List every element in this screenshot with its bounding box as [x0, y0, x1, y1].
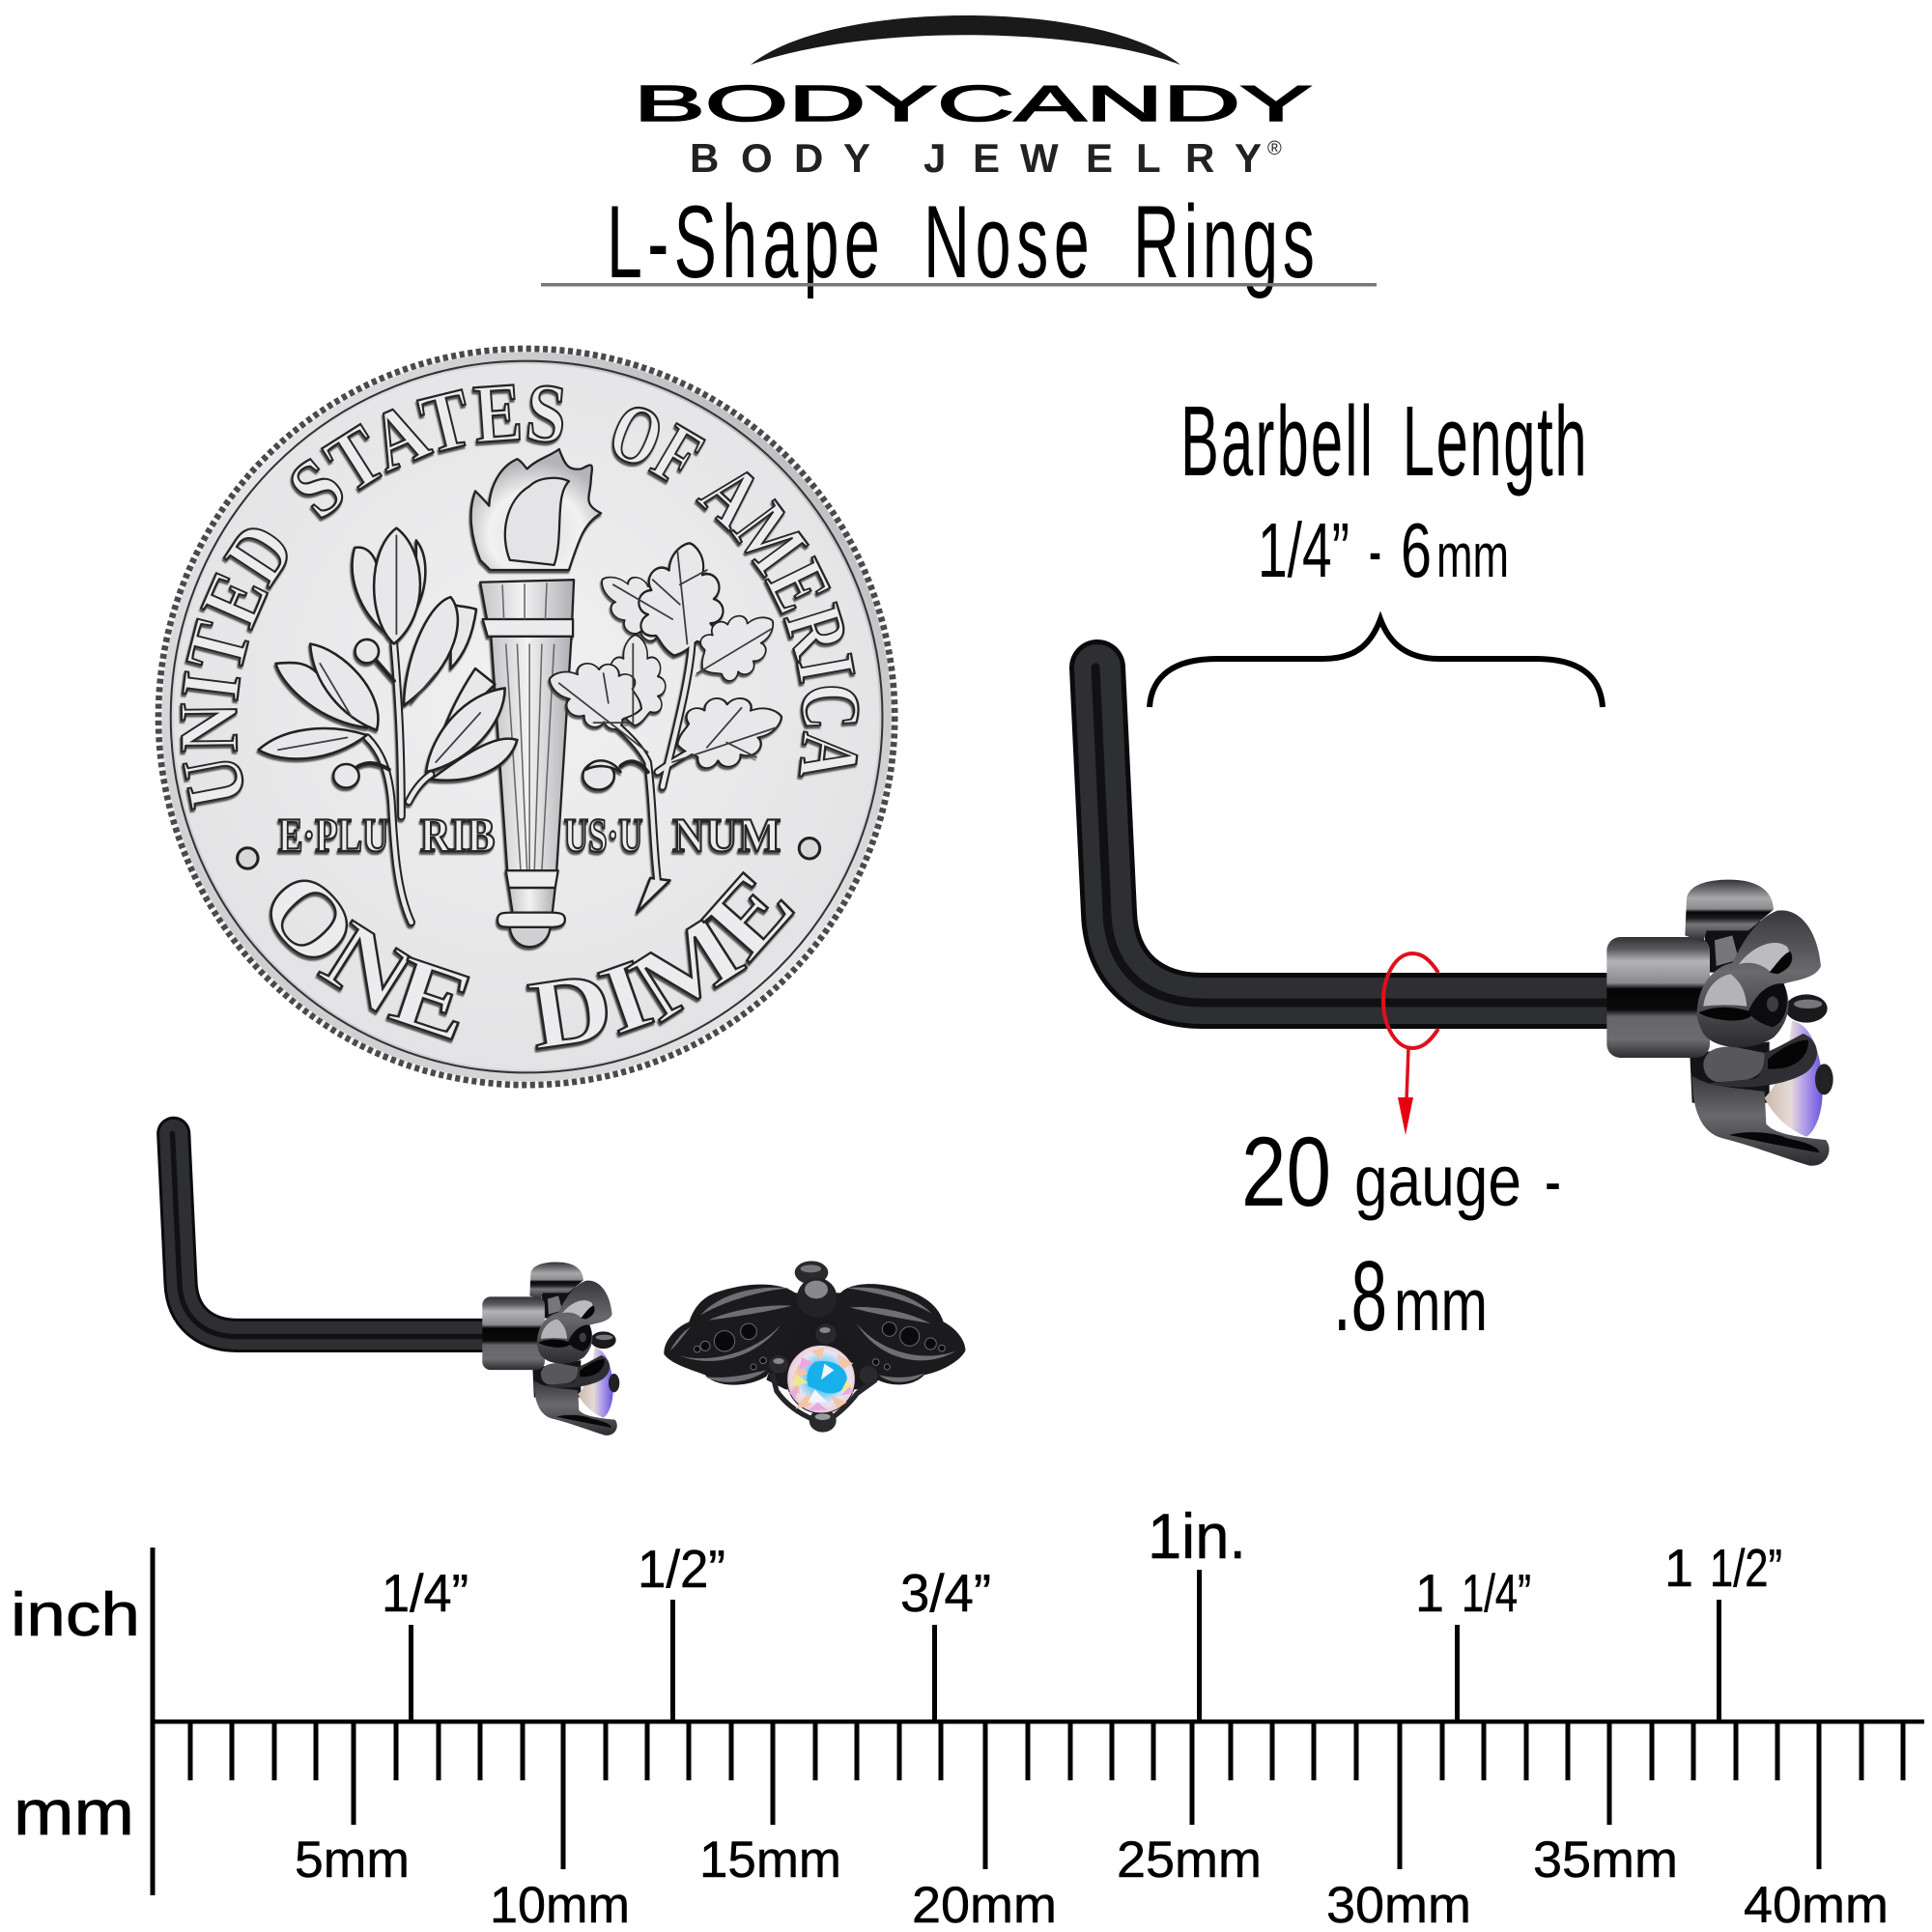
- inch axis label: inch: [11, 1581, 140, 1649]
- coin motto: NUM: [672, 808, 781, 862]
- title: Rings: [1133, 184, 1315, 299]
- brand logo: [634, 15, 1312, 181]
- barbell length value: mm: [1436, 521, 1509, 590]
- barbell length heading: Length: [1403, 385, 1587, 497]
- title: Nose: [923, 184, 1090, 299]
- logo tagline: BODY JEWELRY: [690, 135, 1262, 181]
- millimetre tick labels: 5mm: [295, 1832, 410, 1889]
- barbell length value: 1/4”: [1258, 507, 1350, 593]
- ruler axes: [151, 1548, 1924, 1895]
- reeded edge: [158, 349, 895, 1085]
- barbell length value: -: [1369, 507, 1381, 593]
- barbell length heading: [1180, 385, 1587, 497]
- coin legend: one dime: ONE DIME: [268, 871, 796, 1054]
- gauge label: mm: [1394, 1264, 1488, 1347]
- logo tagline: ®: [1267, 138, 1282, 159]
- millimetre tick labels: 35mm: [1533, 1832, 1678, 1889]
- inch tick labels: [382, 1500, 1782, 1623]
- logo swoosh: [751, 15, 1180, 65]
- inch tick labels: 3/4”: [900, 1563, 991, 1623]
- gauge label: gauge: [1354, 1141, 1521, 1221]
- left wing: [664, 1285, 802, 1385]
- coin: one dime for scale: [155, 346, 898, 1088]
- large L-shape nose ring side view: [1095, 668, 1833, 1166]
- firefly nose ring top front view: [664, 1261, 965, 1433]
- barbell length value: 6: [1401, 507, 1432, 593]
- gauge label: -: [1545, 1141, 1561, 1221]
- inch tick labels: 1in.: [1148, 1500, 1246, 1572]
- coin torch: [471, 449, 601, 947]
- title: L-Shape: [607, 184, 880, 299]
- coin motto: US·U: [564, 808, 643, 862]
- wing highlights: [669, 1288, 956, 1382]
- coin dots: [238, 838, 820, 868]
- wing filigree dots: [694, 1322, 945, 1370]
- gauge label: .8: [1333, 1240, 1387, 1351]
- firefly head and body: [795, 1261, 837, 1345]
- inch tick labels: 1/2”: [638, 1539, 725, 1599]
- gem prongs: [769, 1355, 877, 1433]
- inch ticks: [412, 1570, 1719, 1721]
- barbell length heading: Barbell: [1180, 385, 1373, 497]
- red gauge ring marker: [1383, 953, 1438, 1048]
- gauge label: [1241, 1117, 1561, 1351]
- logo wordmark: BODYCANDY: [634, 76, 1312, 132]
- inch tick labels: 1/4”: [1462, 1563, 1531, 1623]
- iridescent gem: [787, 1345, 855, 1413]
- inch tick labels: 1/4”: [382, 1563, 469, 1623]
- measurement ruler: [11, 1500, 1924, 1932]
- barbell length value: [1258, 507, 1509, 593]
- red arrow to gauge label: [1398, 1048, 1413, 1135]
- brace marking barbell length: [1150, 619, 1603, 707]
- inch tick labels: 1: [1664, 1538, 1693, 1598]
- right wing: [831, 1284, 965, 1384]
- coin olive branch: [259, 528, 517, 923]
- millimetre tick labels: 25mm: [1117, 1832, 1262, 1889]
- coin oak branch: [540, 537, 790, 913]
- small L-shape nose ring side view: [173, 1133, 619, 1435]
- coin motto: RIB: [420, 808, 495, 862]
- millimetre tick labels: [295, 1832, 1889, 1932]
- coin motto: E·PLU: [278, 808, 389, 862]
- mm axis label: mm: [14, 1776, 134, 1848]
- coin legend: united states of america: UNITED STATES OF AMERICA: [178, 384, 860, 813]
- inch tick labels: 1: [1415, 1563, 1444, 1623]
- gauge label: 20: [1241, 1117, 1331, 1227]
- millimetre ticks: [190, 1721, 1903, 1869]
- millimetre tick labels: 15mm: [699, 1832, 841, 1889]
- title: [541, 184, 1377, 299]
- inch tick labels: 1/2”: [1710, 1538, 1782, 1598]
- filigree centre backing: [766, 1293, 879, 1389]
